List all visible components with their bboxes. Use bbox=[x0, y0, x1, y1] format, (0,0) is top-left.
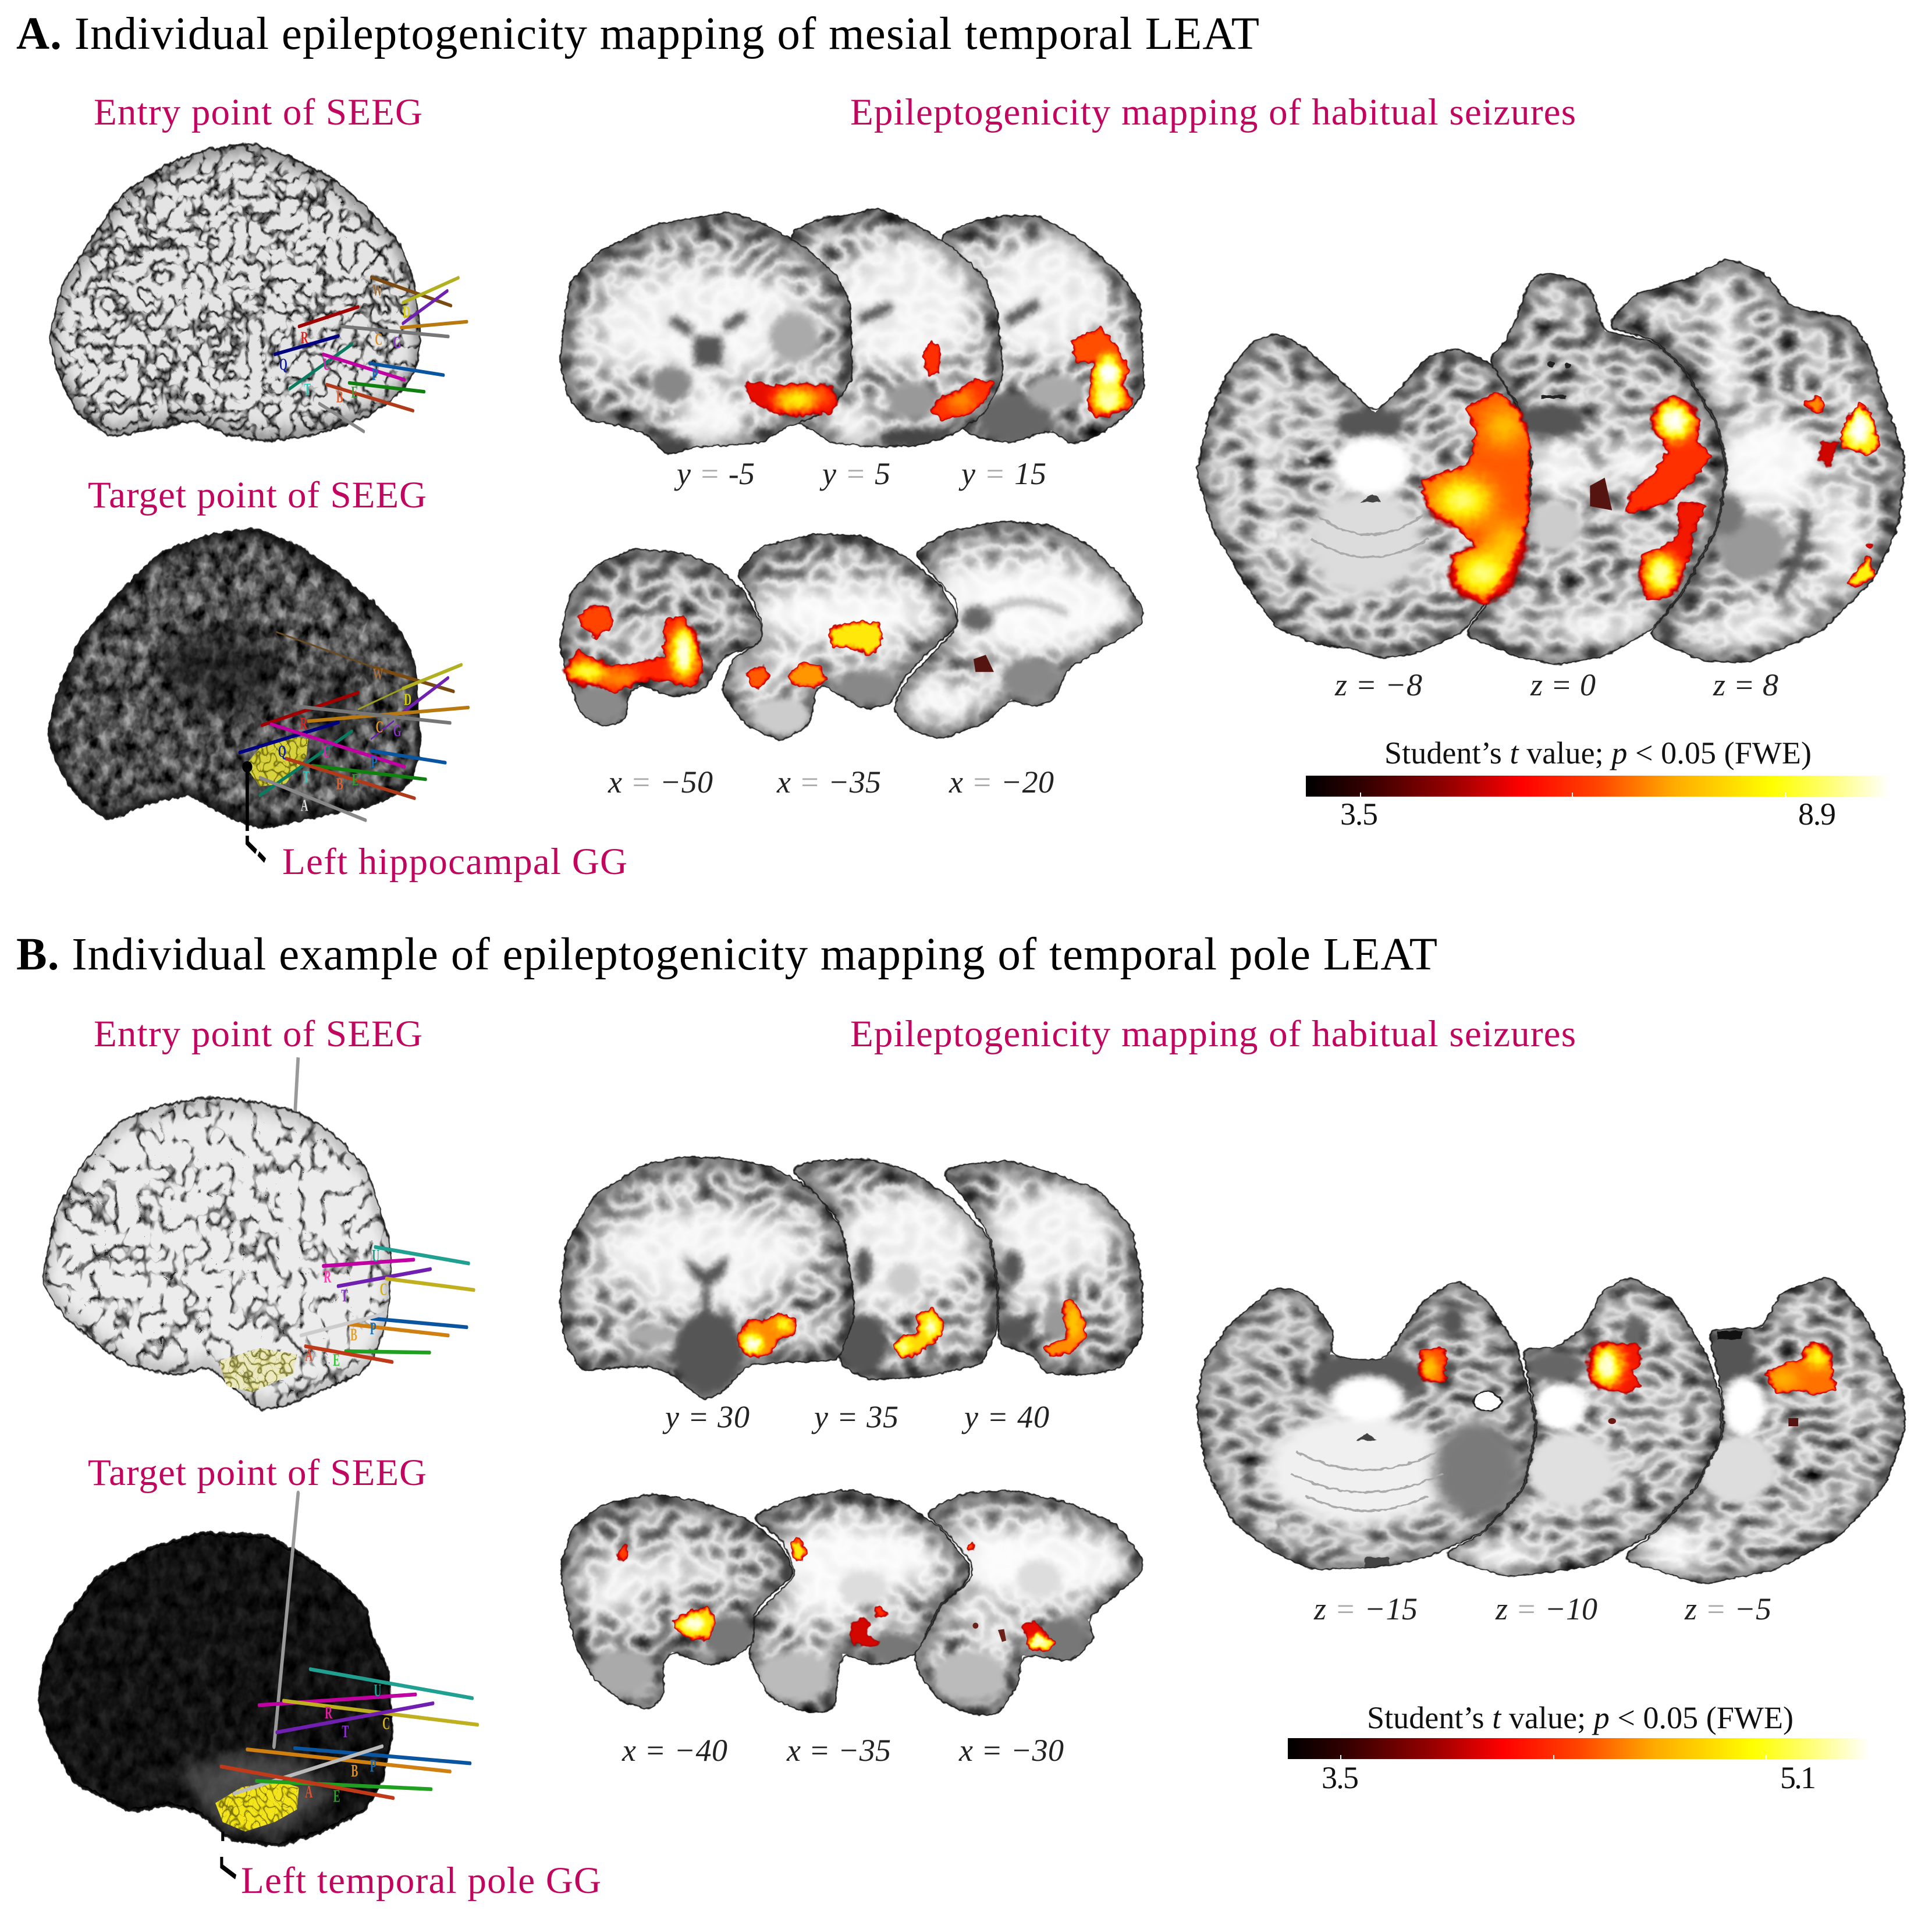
arrow: hippocampal callout line bbox=[244, 764, 265, 861]
panel: A target point label: Target point of SEEG bbox=[88, 474, 427, 516]
brain: A target point section with electrodes: T bbox=[303, 768, 310, 787]
brain: B entry point surface with electrodes: A bbox=[305, 1346, 312, 1365]
brain: B target point section with electrodes: R bbox=[325, 1704, 333, 1722]
label: A sagittal coordinates: x = −35 bbox=[776, 765, 881, 800]
label: B axial coordinates: z = −5 bbox=[1684, 1591, 1771, 1626]
chart: A coronal slices bbox=[559, 207, 1145, 457]
label: A axial coordinates bbox=[1334, 667, 1778, 702]
brain: A entry point surface with electrodes: B bbox=[336, 389, 343, 407]
panel: B entry point label: Entry point of SEEG bbox=[94, 1013, 422, 1055]
label: A coronal coordinates: y = 15 bbox=[958, 456, 1046, 491]
brain: A target point section with electrodes: W bbox=[373, 666, 383, 684]
brain: B target point section with electrodes: P bbox=[370, 1757, 377, 1776]
label: B sagittal coordinates: x = −30 bbox=[958, 1733, 1064, 1768]
brain: A target point section with electrodes: U bbox=[323, 744, 331, 762]
brain: A entry point surface with electrodes: U bbox=[323, 356, 331, 374]
panel: A entry point label: Entry point of SEEG bbox=[94, 91, 422, 133]
heading: panel B title: B. Individual example of epileptogenicity mapping of temporal pole LEAT bbox=[16, 929, 1437, 980]
brain: B entry point surface with electrodes: B bbox=[350, 1326, 357, 1345]
brain: A target point section with electrodes: R bbox=[300, 715, 308, 733]
brain: B target point section with electrodes: T bbox=[342, 1722, 349, 1742]
brain: B entry point surface with electrodes: R bbox=[324, 1267, 332, 1287]
arrow: temporal pole callout line bbox=[222, 1832, 236, 1877]
brain: B entry point surface with electrodes bbox=[41, 1057, 474, 1411]
legend: A colour scale: 3.5 bbox=[1340, 797, 1378, 832]
label: A sagittal coordinates: x = −20 bbox=[949, 765, 1054, 800]
legend: B colour scale bbox=[1288, 1700, 1869, 1795]
brain: A entry point surface with electrodes: E bbox=[351, 383, 358, 402]
label: A axial coordinates: z = 8 bbox=[1713, 667, 1778, 702]
brain: B target point section with electrodes bbox=[37, 1494, 478, 1848]
label: A axial coordinates: z = 0 bbox=[1530, 667, 1596, 702]
label: B sagittal coordinates bbox=[621, 1733, 1064, 1768]
brain: A entry point surface with electrodes: Q bbox=[279, 356, 287, 374]
chart: A sagittal slices bbox=[559, 520, 1145, 742]
label: B sagittal coordinates: x = −35 bbox=[786, 1733, 891, 1768]
brain: A entry point surface with electrodes: T bbox=[304, 381, 311, 399]
brain: B target point section with electrodes: E bbox=[333, 1787, 340, 1806]
label: B axial coordinates bbox=[1313, 1591, 1771, 1626]
brain: B target point section with electrodes: U bbox=[374, 1682, 381, 1700]
label: A coronal coordinates: y = -5 bbox=[674, 456, 755, 491]
chart: A axial slices bbox=[1196, 257, 1906, 666]
legend: B colour scale: 3.5 bbox=[1322, 1760, 1359, 1795]
brain: A entry point surface with electrodes: R bbox=[301, 329, 308, 347]
brain: B target point section with electrodes: C bbox=[382, 1714, 390, 1733]
panel: B epileptogenicity heading: Epileptogenicity mapping of habitual seizures bbox=[850, 1013, 1576, 1055]
brain: A entry point surface with electrodes: W bbox=[372, 282, 383, 300]
label: B sagittal coordinates: x = −40 bbox=[621, 1733, 727, 1768]
brain: A target point section with electrodes: D bbox=[404, 691, 411, 709]
legend: A colour scale: Student’s t value; p < 0.05 (FWE) bbox=[1384, 736, 1812, 770]
label: B coronal coordinates: y = 35 bbox=[811, 1399, 898, 1434]
label: A axial coordinates: z = −8 bbox=[1334, 667, 1422, 702]
brain: A entry point surface with electrodes bbox=[48, 143, 467, 442]
label: B axial coordinates: z = −15 bbox=[1313, 1591, 1418, 1626]
brain: B target point section with electrodes: B bbox=[351, 1761, 358, 1781]
brain: B entry point surface with electrodes: C bbox=[380, 1280, 388, 1299]
brain: B target point section with electrodes: A bbox=[305, 1782, 312, 1802]
brain: A target point section with electrodes: E bbox=[352, 771, 359, 790]
brain: A target point section with electrodes: G bbox=[393, 722, 402, 740]
brain: A target point section with electrodes bbox=[47, 527, 468, 830]
label: left hippocampal GG: Left hippocampal GG bbox=[282, 841, 627, 883]
label: B coronal coordinates bbox=[662, 1399, 1049, 1434]
brain: A target point section with electrodes: B bbox=[336, 776, 343, 794]
legend: A colour scale: 8.9 bbox=[1798, 797, 1836, 832]
brain: A entry point surface with electrodes: D bbox=[403, 304, 410, 322]
brain: B entry point surface with electrodes: P bbox=[370, 1319, 377, 1338]
label: A sagittal coordinates: x = −50 bbox=[608, 765, 713, 800]
panel: A epileptogenicity heading: Epileptogenicity mapping of habitual seizures bbox=[850, 91, 1576, 133]
heading: panel A title: A. Individual epileptogenicity mapping of mesial temporal LEAT bbox=[16, 9, 1259, 59]
legend: B colour scale: Student’s t value; p < 0.05 (FWE) bbox=[1367, 1700, 1794, 1735]
label: B coronal coordinates: y = 40 bbox=[961, 1399, 1049, 1434]
label: A coronal coordinates: y = 5 bbox=[819, 456, 890, 491]
brain: A entry point surface with electrodes: C bbox=[375, 331, 382, 349]
label: A sagittal coordinates bbox=[608, 765, 1054, 800]
chart: B axial slices bbox=[1196, 1275, 1906, 1585]
legend: A colour scale bbox=[1306, 736, 1889, 832]
brain: B entry point surface with electrodes: E bbox=[333, 1351, 340, 1370]
chart: B sagittal slices bbox=[559, 1489, 1145, 1715]
brain: A target point section with electrodes: C bbox=[376, 719, 383, 737]
legend: B colour scale: 5.1 bbox=[1780, 1760, 1816, 1795]
label: A coronal coordinates bbox=[674, 456, 1046, 491]
brain: A target point section with electrodes: A bbox=[301, 797, 308, 815]
brain: A target point section with electrodes: Q bbox=[278, 743, 286, 761]
brain: A entry point surface with electrodes: P bbox=[372, 366, 378, 384]
label: left temporal pole GG: Left temporal pole GG bbox=[241, 1860, 601, 1902]
brain: A entry point surface with electrodes: G bbox=[393, 334, 402, 352]
label: B axial coordinates: z = −10 bbox=[1495, 1591, 1597, 1626]
chart: B coronal slices bbox=[559, 1156, 1143, 1402]
brain: A target point section with electrodes: P bbox=[371, 754, 378, 772]
brain: B entry point surface with electrodes: T bbox=[341, 1287, 348, 1306]
label: B coronal coordinates: y = 30 bbox=[662, 1399, 750, 1434]
panel: B target point label: Target point of SEEG bbox=[88, 1452, 427, 1494]
brain: B entry point surface with electrodes: U bbox=[372, 1246, 379, 1266]
